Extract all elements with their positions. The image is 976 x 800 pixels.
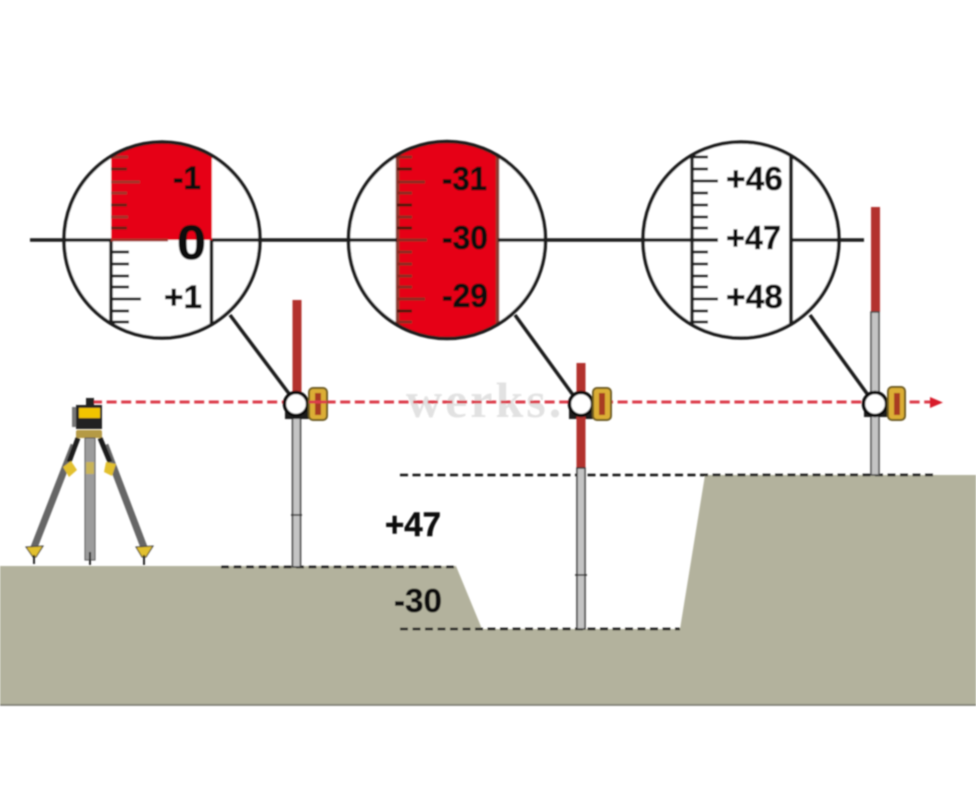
magnifier 3: reading +47: +48 xyxy=(726,278,783,315)
staff 1 xyxy=(291,300,302,567)
staff 2 xyxy=(575,363,587,629)
magnifier 1: reading 0: -1 xyxy=(173,160,201,196)
reference dashed levels xyxy=(221,475,936,629)
magnifier 3: reading +47: +47 xyxy=(726,219,781,256)
label: +47: +47 xyxy=(385,506,441,544)
laser beam with arrow xyxy=(92,397,943,408)
magnifier 1: reading 0 xyxy=(63,140,260,338)
magnifier 2: reading -30: -29 xyxy=(442,277,488,314)
magnifier 2: reading -30 xyxy=(348,140,546,340)
magnifier 2: reading -30: -31 xyxy=(442,160,487,197)
label: -30: -30 xyxy=(394,582,442,619)
receiver 3 xyxy=(864,387,905,420)
receiver 2 xyxy=(569,385,611,435)
laser level on tripod xyxy=(26,398,153,565)
receiver 1 xyxy=(284,388,327,420)
ground profile xyxy=(0,475,976,705)
watermark: werks. xyxy=(406,372,564,428)
magnifier 3: reading +47 xyxy=(643,140,840,340)
magnifier 2: reading -30: -30 xyxy=(442,219,488,256)
horizontal sight line xyxy=(30,238,864,242)
staff 3 xyxy=(871,207,880,475)
magnifier 1: reading 0: +1 xyxy=(164,279,202,315)
magnifier 1: reading 0: 0 xyxy=(177,217,206,270)
leader lines xyxy=(230,315,868,395)
magnifier 3: reading +47: +46 xyxy=(726,160,783,197)
